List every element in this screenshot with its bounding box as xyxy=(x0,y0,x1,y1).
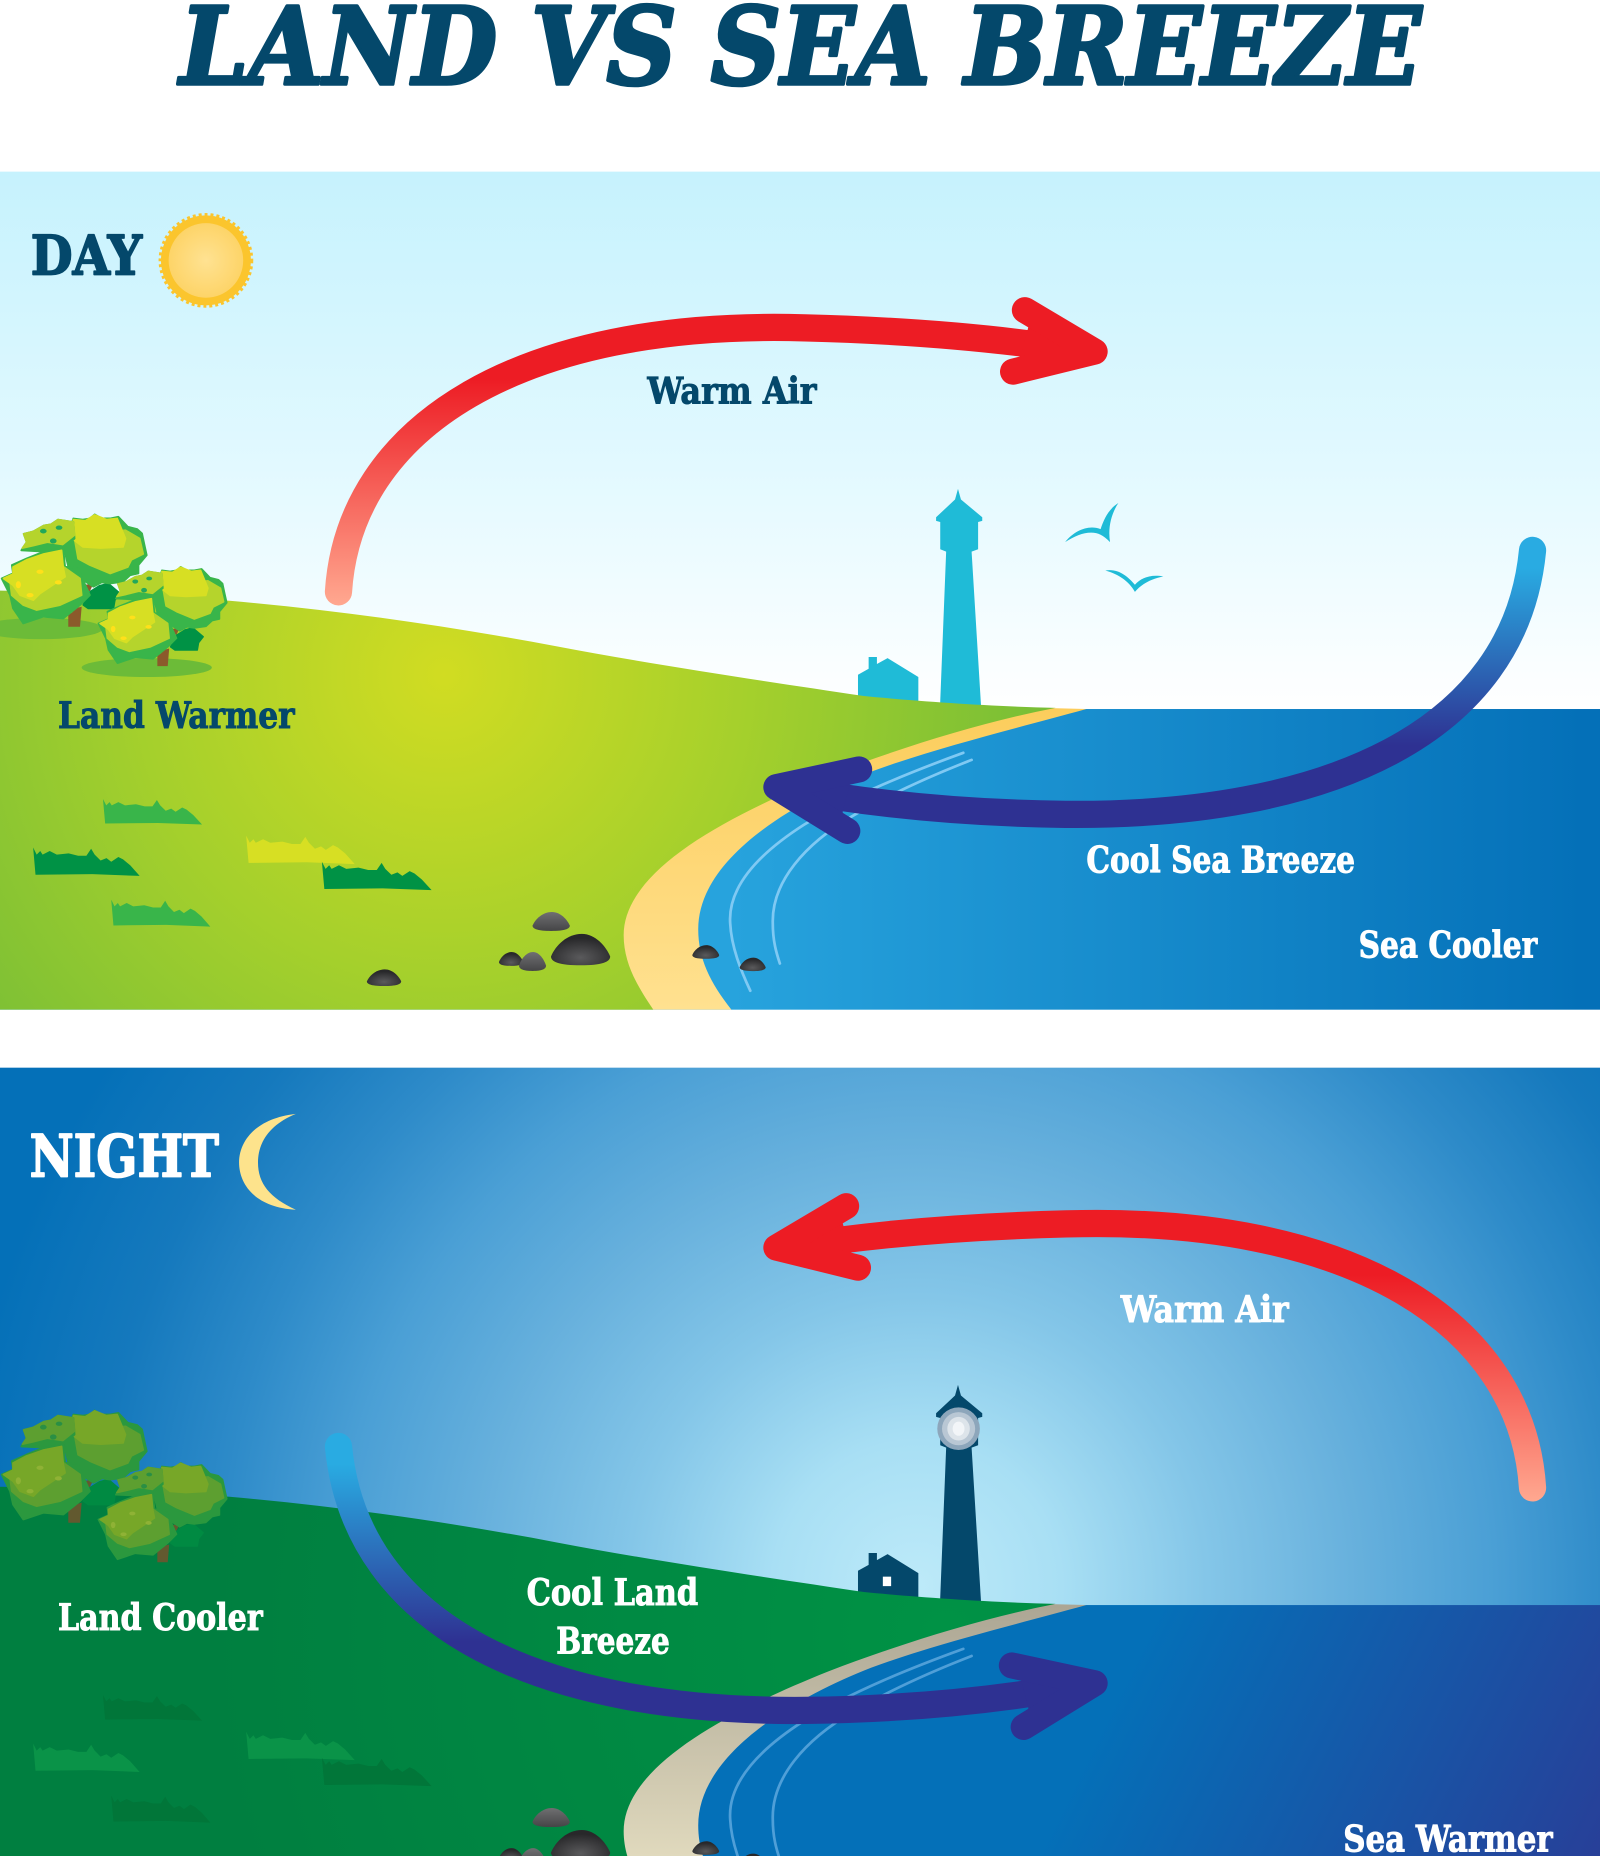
night sea xyxy=(0,1605,1600,1856)
label: cool land breeze xyxy=(527,1571,698,1663)
night heading: NIGHT xyxy=(30,1123,219,1191)
moon icon xyxy=(239,1114,296,1210)
day rocks xyxy=(367,912,766,986)
day sky xyxy=(0,172,1600,710)
label: cool land breeze: Breeze xyxy=(556,1620,670,1663)
cool sea breeze arrow, day xyxy=(775,550,1533,831)
sun icon xyxy=(160,215,251,306)
night sky xyxy=(0,1068,1600,1606)
label: land cooler: Land Cooler xyxy=(58,1596,263,1639)
warm air arrow, day xyxy=(338,309,1095,592)
day beach xyxy=(592,708,1086,1010)
night land xyxy=(0,1487,1056,1856)
day trees xyxy=(2,514,227,666)
warm air arrow, night xyxy=(776,1205,1533,1488)
day sea xyxy=(0,709,1600,1010)
night grass tufts xyxy=(33,1695,432,1823)
cool land breeze arrow, night xyxy=(338,1446,1096,1727)
day lighthouse xyxy=(936,489,982,716)
label: warm air, night: Warm Air xyxy=(1120,1288,1289,1331)
day sea ripples xyxy=(730,753,972,991)
day grass tufts xyxy=(33,799,432,927)
day house xyxy=(858,657,918,710)
night beach xyxy=(592,1604,1086,1856)
night rocks xyxy=(499,1808,766,1856)
label: sea cooler: Sea Cooler xyxy=(1359,924,1538,967)
day tree shadows xyxy=(0,618,212,677)
label: warm air, day: Warm Air xyxy=(646,370,817,413)
label: cool sea breeze: Cool Sea Breeze xyxy=(1086,838,1355,881)
day heading: DAY xyxy=(31,224,143,288)
panel: day scene xyxy=(0,172,1600,1010)
label: land warmer: Land Warmer xyxy=(58,694,295,737)
day birds xyxy=(1065,503,1163,592)
label: cool land breeze: Cool Land xyxy=(527,1571,698,1614)
night sea ripples xyxy=(730,1649,972,1856)
night trees xyxy=(2,1410,227,1562)
night lighthouse with lit lantern xyxy=(936,1385,982,1612)
day land xyxy=(0,591,1056,1010)
panel: night scene xyxy=(0,1068,1600,1856)
night house xyxy=(858,1553,918,1606)
